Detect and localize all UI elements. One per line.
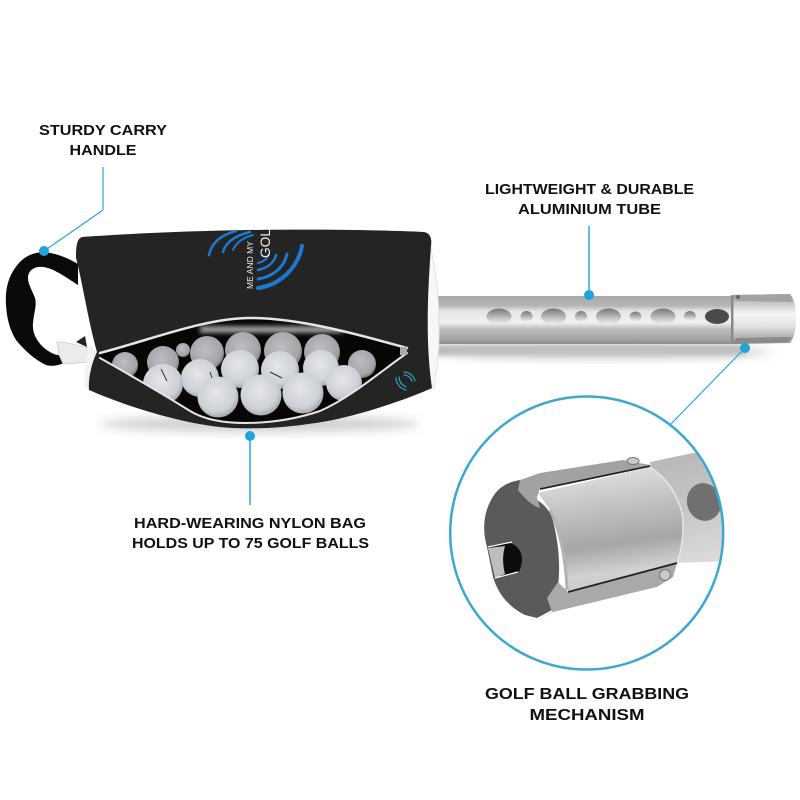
bag logo text: GOL	[257, 229, 273, 258]
heading: grabbing mechanism	[485, 686, 689, 724]
sleeve rim	[550, 510, 567, 590]
heading: aluminium tube: LIGHTWEIGHT & DURABLE	[485, 181, 694, 198]
callout: handle leader	[39, 167, 103, 256]
heading: sturdy carry handle: HANDLE	[70, 142, 136, 159]
heading: nylon bag: HARD-WEARING NYLON BAG	[134, 515, 366, 532]
callout: mechanism leader	[671, 343, 750, 424]
aluminium tube	[430, 294, 796, 358]
callout: tube leader	[584, 226, 594, 300]
bottom clip	[537, 563, 677, 620]
heading: nylon bag: HOLDS UP TO 75 GOLF BALLS	[132, 535, 369, 552]
heading: grabbing mechanism: MECHANISM	[530, 707, 644, 724]
top clip	[518, 460, 650, 508]
open end	[484, 480, 559, 618]
close-up circle outline	[450, 396, 723, 670]
heading: sturdy carry handle: STURDY CARRY	[39, 122, 167, 139]
bag shadow	[100, 416, 420, 432]
bag mouth interior	[100, 318, 407, 423]
heading: grabbing mechanism: GOLF BALL GRABBING	[485, 686, 689, 703]
small bag logo	[396, 372, 415, 390]
callout: bag leader	[245, 431, 255, 505]
heading: aluminium tube	[485, 181, 694, 218]
carry handle	[6, 252, 89, 366]
bag logo text: ME AND MY	[246, 240, 255, 289]
tube end cap	[730, 294, 796, 344]
bag logo	[209, 231, 302, 288]
zipper pull	[400, 347, 407, 355]
mechanism close-up	[484, 450, 735, 620]
handle strap buckle	[57, 342, 89, 364]
zipper trim	[100, 318, 407, 423]
tube section	[650, 452, 722, 563]
heading: nylon bag	[132, 515, 369, 552]
sleeve	[538, 467, 683, 591]
heading: sturdy carry handle	[39, 122, 167, 159]
bag logo text	[246, 229, 273, 289]
heading: aluminium tube: ALUMINIUM TUBE	[518, 201, 661, 218]
golf balls	[112, 326, 376, 418]
tube holes	[486, 308, 729, 324]
white bag left edge	[85, 345, 100, 392]
slot in end	[488, 543, 522, 578]
white bag side panel	[420, 236, 439, 392]
nylon bag	[76, 229, 432, 428]
